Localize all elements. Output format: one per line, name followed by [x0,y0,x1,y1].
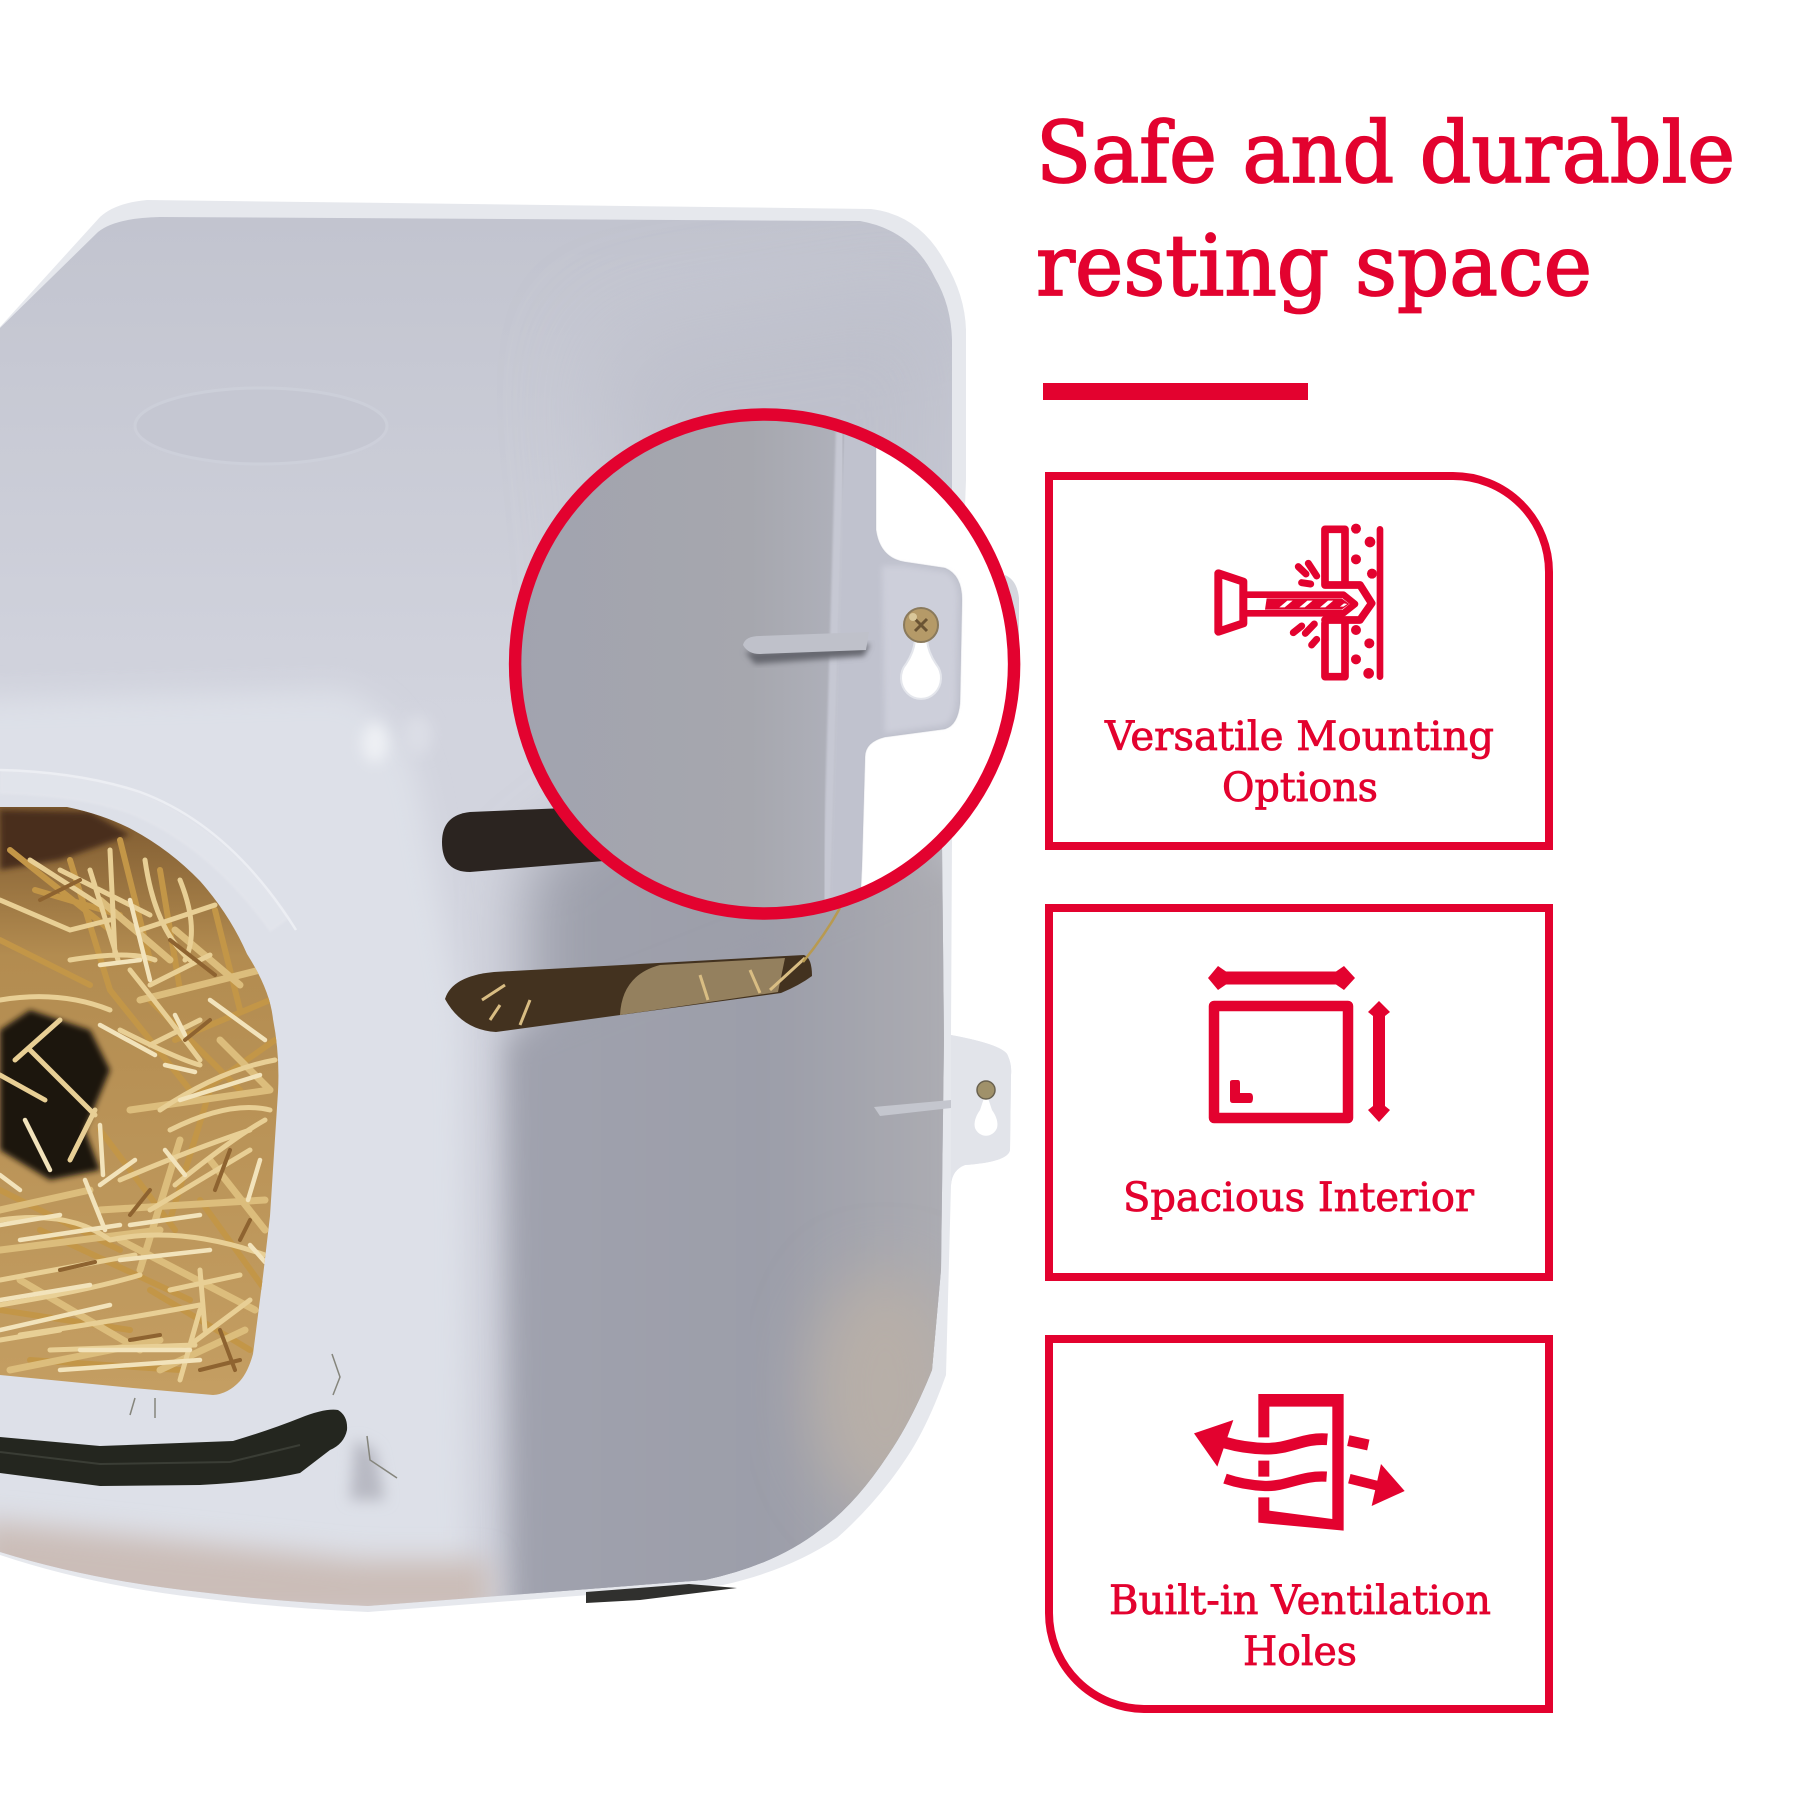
black cable perch [0,1410,347,1486]
magnified tab face [832,434,962,898]
panel frame [1049,1339,1549,1709]
keyhole [901,640,941,699]
magnifier ring [515,414,1014,914]
panel frame [1049,908,1549,1277]
stray straw strand [803,908,840,962]
nesting box body with lip and side tab [0,200,1011,1612]
label: Options [1222,765,1378,811]
shaded surfaces of the box [0,200,1000,1640]
label: Built-in Ventilation [1109,1578,1491,1624]
panel frame [1049,476,1549,846]
icon: air through door [1194,1394,1405,1531]
title: Safe and durable [1036,104,1735,202]
stray hairs [130,1354,397,1478]
lower screw [977,1081,995,1099]
screw [904,608,938,642]
vertical ridge [826,410,841,925]
icon: drill through wall [1218,524,1380,679]
lower keyhole [975,1098,997,1136]
label [1104,714,1494,811]
panel: built-in ventilation holes [1049,1339,1549,1709]
magnified wall and tab [521,420,962,908]
embossed logo oval [135,388,387,464]
magnifier circle: mounting tab close-up [500,400,1030,930]
lower mounting rib [874,1100,951,1116]
lower mounting tab detail [874,1035,1011,1185]
label: Spacious Interior [1123,1175,1475,1221]
product: grey nesting box [0,200,1011,1640]
title underline [1043,383,1308,400]
panel: spacious interior [1049,908,1549,1277]
ventilation slot, lower with straw inside [445,955,812,1032]
door opening with straw [0,800,290,1400]
door surround ridge [0,770,296,930]
ventilation slot, upper [442,805,640,872]
horizontal rib [745,644,870,664]
panel: versatile mounting options [1049,476,1549,846]
title: resting space [1036,217,1592,315]
title [1036,104,1735,315]
sliver of tab behind magnifier [1005,575,1019,650]
icon: dimensions square [1208,966,1390,1122]
dark foot under box [586,1584,737,1603]
label: Versatile Mounting [1104,714,1494,760]
label [1109,1578,1491,1675]
label: Holes [1243,1629,1357,1675]
